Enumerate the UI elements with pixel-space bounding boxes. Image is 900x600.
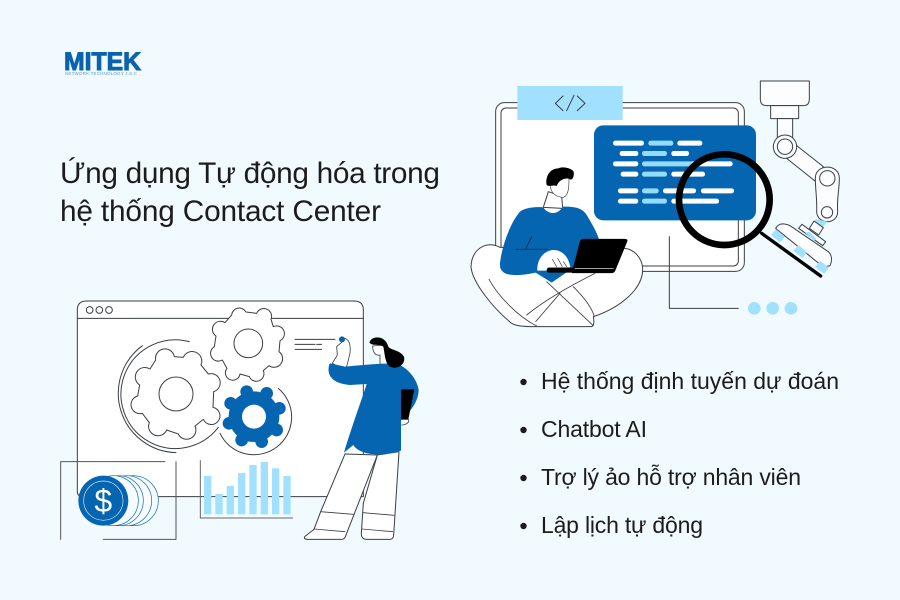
connector with three dots: [669, 237, 797, 315]
upper outline gear: [211, 308, 284, 381]
code tag: [517, 86, 623, 120]
bar chart: [200, 461, 293, 518]
title: Ứng dụng Tự động hóa trong: [60, 157, 440, 190]
logo: MITEK: NETWORK TECHNOLOGY J.S.C: [65, 71, 138, 76]
dollar coins: [78, 476, 158, 526]
frame around coins: [61, 462, 176, 539]
blue code panel: [594, 125, 756, 220]
monitor frame: [496, 103, 744, 271]
large outline gear: [131, 349, 220, 439]
illustration: gears, chart, coins and woman: [61, 301, 419, 539]
title: hệ thống Contact Center: [60, 195, 381, 228]
robot arm: [760, 81, 839, 274]
item: predictive routing: Hệ thống định tuyến dự đoán: [541, 368, 839, 394]
logo: MITEK: MITEK: [64, 48, 141, 76]
gears group: [118, 308, 292, 455]
browser window: [77, 301, 363, 497]
item: auto scheduling: Lập lịch tự động: [541, 512, 703, 538]
bullet list: [520, 368, 839, 538]
dollar coins: $: [94, 483, 112, 519]
title: [60, 157, 440, 228]
item: virtual assistant: Trợ lý ảo hỗ trợ nhân viên: [541, 464, 801, 490]
item: chatbot: Chatbot AI: [541, 416, 647, 442]
blue gear: [223, 385, 286, 448]
woman: [304, 336, 419, 539]
gear arcs: [118, 340, 292, 455]
magnifying glass: [679, 154, 821, 276]
pointer lines: [295, 339, 335, 349]
illustration: person with laptop, code screen, magnifier and robot arm: [471, 81, 839, 327]
person with laptop: [471, 167, 643, 327]
